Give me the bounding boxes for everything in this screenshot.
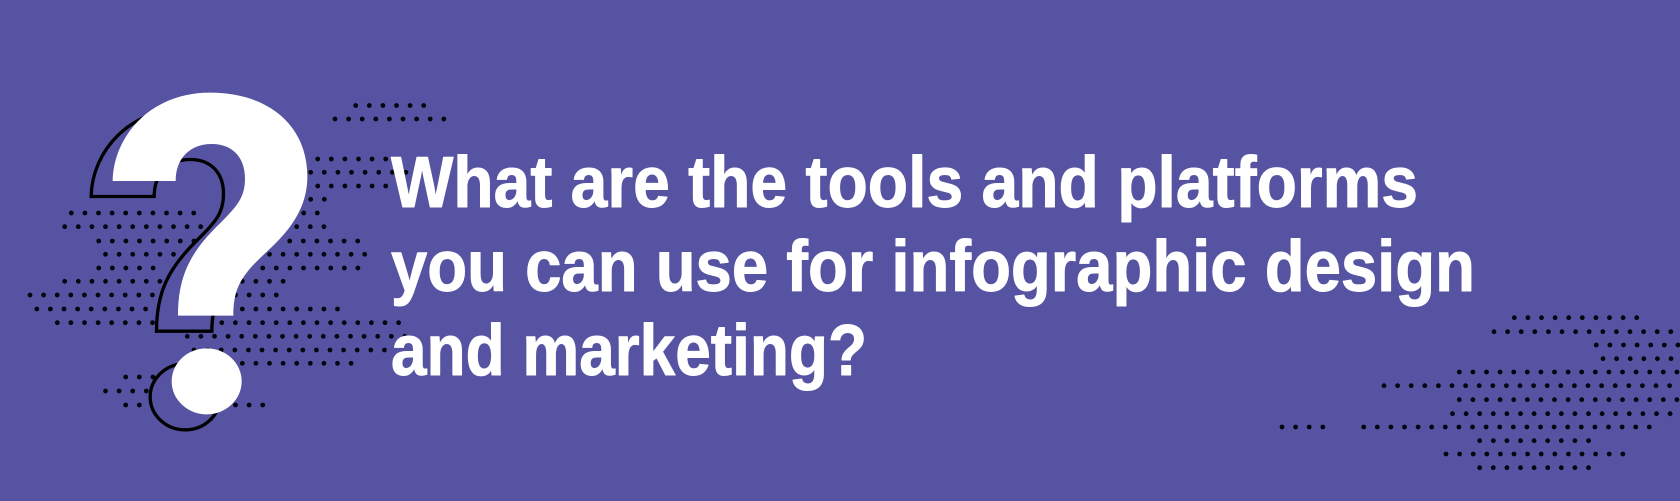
heading: you can use for infographic design <box>391 227 1475 307</box>
heading <box>391 143 1475 391</box>
heading: What are the tools and platforms <box>391 143 1418 223</box>
dot pattern: right cluster <box>1282 318 1680 468</box>
icon: question mark outline shadow <box>91 108 286 430</box>
heading: and marketing? <box>391 311 867 391</box>
icon: white question mark <box>113 93 307 414</box>
dot pattern: left cluster <box>30 106 445 405</box>
